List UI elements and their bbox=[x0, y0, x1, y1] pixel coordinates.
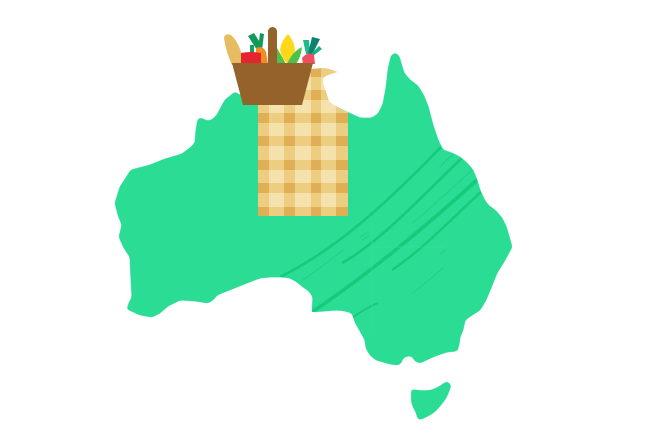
icon: baguette bbox=[224, 34, 244, 65]
infographic: Australia map with picnic basket bbox=[114, 27, 512, 420]
icon: basket handle bbox=[268, 27, 277, 67]
icon: carrot with leaves bbox=[248, 33, 268, 64]
picnic basket with produce bbox=[224, 27, 322, 105]
icon: radish with leaves bbox=[302, 37, 322, 64]
map: mainland Australia bbox=[115, 53, 512, 365]
tablecloth: gingham pattern bbox=[258, 65, 348, 216]
map: brush streaks across the east bbox=[280, 147, 481, 330]
icon: red pepper bbox=[241, 45, 261, 64]
icon: basket body bbox=[232, 63, 313, 105]
map: Tasmania bbox=[411, 382, 451, 420]
icon: corn with husks bbox=[277, 34, 302, 64]
